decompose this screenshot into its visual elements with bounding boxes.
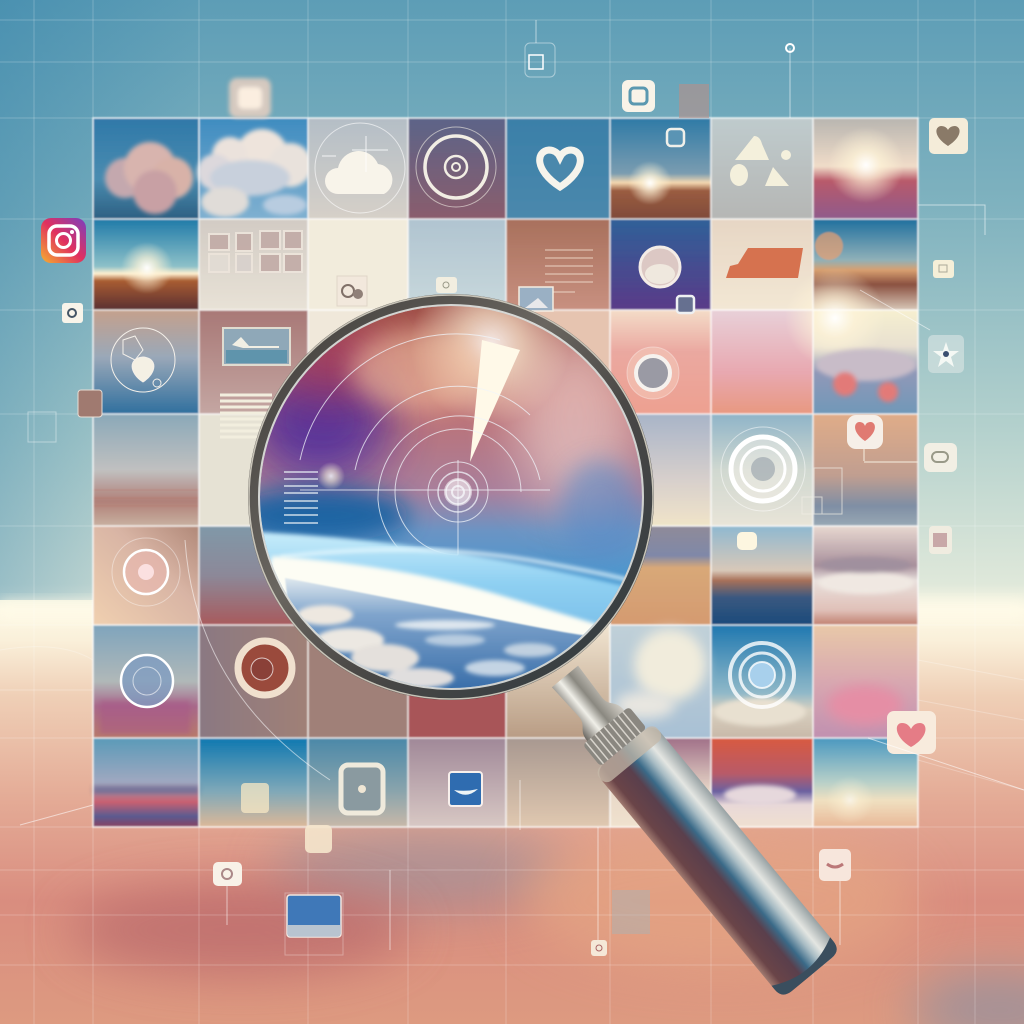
icon: star tile	[928, 335, 964, 373]
icon: camera left	[62, 303, 83, 323]
magnifying glass handle	[536, 652, 841, 999]
image grid panel	[93, 118, 918, 827]
neck	[546, 661, 624, 741]
icon: photo card	[337, 276, 367, 306]
icon: link badge	[924, 443, 957, 472]
icon: faded tile	[679, 84, 709, 118]
icon: photo left	[78, 390, 102, 417]
icon: orbit drop	[111, 328, 175, 392]
lens scene	[260, 306, 642, 688]
icon: speech heart	[847, 415, 918, 462]
icon: red card	[726, 248, 803, 278]
icon: lens flares	[112, 347, 805, 707]
barrel cap	[594, 723, 664, 785]
knurled collar	[583, 707, 647, 766]
cloud base	[284, 578, 584, 688]
bright arc	[280, 550, 633, 583]
icon: text lines brown tile	[545, 250, 593, 292]
icon: small square	[529, 55, 543, 69]
atmosphere band	[263, 529, 621, 688]
icon: mini sky photo	[519, 287, 553, 311]
row 5 tiles	[93, 526, 918, 625]
icon: outline left	[28, 412, 56, 442]
icon: cloud with ring	[315, 123, 405, 213]
icon: sky card	[285, 893, 343, 955]
icon: focus ring	[416, 127, 496, 207]
outer highlight	[249, 295, 653, 699]
icon: lens circle	[640, 247, 680, 287]
text lines block	[284, 472, 318, 523]
flower clouds	[93, 349, 916, 805]
icon: instagram	[41, 218, 86, 263]
rim	[254, 300, 648, 694]
icon: small glow tile	[737, 532, 757, 550]
icon: faded square	[612, 890, 650, 934]
icon: broken heart	[887, 711, 936, 754]
row 2 tiles	[93, 219, 918, 310]
icon: heart	[540, 150, 580, 187]
magnifying lens	[248, 294, 654, 700]
barrel end	[772, 937, 841, 999]
white band	[255, 556, 600, 660]
icon: square frame	[341, 765, 383, 813]
icon: bottom tiles	[213, 783, 851, 956]
collar ridges	[586, 712, 641, 764]
clouds	[297, 605, 556, 688]
icon: top left tile	[229, 78, 271, 118]
icon: square	[525, 43, 555, 77]
icon: blue tile	[449, 772, 482, 806]
icon: small badge	[436, 277, 457, 293]
icon: phone tile	[929, 526, 952, 554]
icon: outlined squares	[802, 468, 842, 514]
row 6 tiles	[93, 625, 918, 738]
icon: heart badge	[929, 118, 968, 154]
row 3 tiles	[93, 310, 918, 414]
sun glows	[121, 127, 904, 824]
tile icons	[111, 123, 964, 813]
icon: small ring	[786, 44, 794, 52]
icon: framed chart	[223, 328, 290, 365]
icon: white rounded	[622, 80, 655, 112]
row 7 tiles	[93, 738, 918, 827]
icon: photo strip	[209, 231, 302, 272]
barrel	[594, 723, 841, 999]
rim highlight	[259, 305, 643, 689]
row 4 tiles	[93, 414, 918, 526]
icon: small framed badge	[677, 296, 694, 313]
icon: rounded square	[667, 129, 684, 146]
tile grid lines	[93, 118, 918, 827]
icon: tile right	[933, 260, 954, 278]
icon: shapes	[730, 136, 791, 186]
target rings	[300, 334, 550, 555]
row 1 tiles	[93, 118, 918, 219]
icon: text lines left	[220, 395, 272, 437]
